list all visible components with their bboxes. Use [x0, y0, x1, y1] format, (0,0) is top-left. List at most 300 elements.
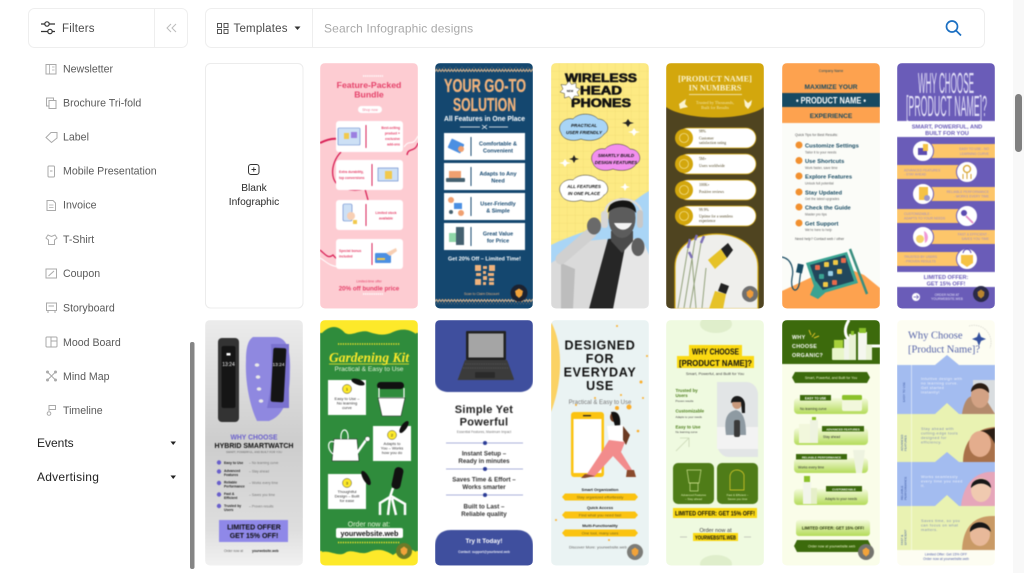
- heading: MAXIMIZE YOUR: [804, 84, 858, 91]
- tip: shortcuts: Use Shortcuts: [805, 159, 844, 165]
- feature: fast: FAST & EFFICIENT -: [958, 232, 989, 236]
- note 3: [328, 470, 373, 509]
- item: Mobile Presentation: Mobile Presentation: [63, 166, 157, 178]
- tip: explore: Explore Features: [805, 174, 852, 180]
- item: Coupon: Coupon: [63, 268, 100, 280]
- stat: 100K+: 100K+: [699, 183, 710, 187]
- decorative ribbons: [320, 139, 418, 263]
- dotted decoration: [338, 344, 400, 542]
- heading: CHOOSE: [792, 344, 817, 350]
- offer text: 20% off bundle price: [339, 286, 400, 292]
- icon: dropdown caret: [294, 26, 300, 30]
- order line: ORDER NOW AT: [935, 293, 959, 297]
- heading: IN NUMBERS: [689, 84, 742, 92]
- note 2: You – Works: [381, 446, 403, 450]
- banner: [792, 372, 870, 383]
- benefit: built to last: Reliable quality: [461, 511, 507, 518]
- row: easy to use: [897, 355, 995, 414]
- benefit: easy to use: [676, 424, 701, 434]
- panel: fast and efficient: Fast & Efficient –: [727, 493, 749, 497]
- item: Coupon: [46, 268, 100, 280]
- offer text: [339, 280, 400, 292]
- heading: DESIGNED: [565, 338, 635, 352]
- panel: advanced features: [673, 463, 714, 504]
- offer bar: [796, 520, 870, 536]
- heading: [PRODUCT NAME]?: [679, 358, 752, 368]
- background blue shape: [551, 190, 649, 264]
- feature: reliable: - WORKS EVERY TIME: [954, 194, 990, 198]
- experience label: EXPERIENCE: [810, 113, 853, 120]
- stat: 98%: satisfaction rating: [699, 141, 726, 145]
- card: why choose organic: [782, 320, 880, 566]
- cloud: practical: USER FRIENDLY: [566, 130, 603, 135]
- footer text: Limited Offer: Get 15% OFF: [925, 552, 967, 556]
- item: Invoice: [47, 200, 97, 212]
- icon: filter sliders: [41, 22, 55, 34]
- photo: woman with blender: [717, 382, 758, 457]
- benefit: instant setup: [446, 441, 523, 465]
- icon: purple smartwatch: [246, 337, 290, 421]
- subheading band: [897, 121, 995, 137]
- card: why choose product green: [666, 315, 764, 573]
- row: best-selling: [336, 121, 403, 152]
- benefit: saves time: [446, 467, 523, 491]
- benefit: quick access: Find what you need fast: [579, 512, 622, 518]
- tip: support: [796, 220, 839, 232]
- blank label: Infographic: [229, 197, 279, 208]
- tip: support: We're here to help: [805, 228, 832, 232]
- cloud: all features: ALL FEATURES: [566, 184, 601, 189]
- offer bar: LIMITED OFFER: GET 15% OFF!: [802, 526, 864, 530]
- row: reliable: [897, 452, 995, 506]
- category: Advertising: [37, 470, 176, 484]
- help line: Need help? Contact web / other: [795, 237, 845, 241]
- row: special bonus: Special bonus: [339, 249, 362, 253]
- icon: plus: [248, 164, 259, 174]
- blank label: Blank: [241, 183, 268, 194]
- card: feature-packed bundle: [320, 63, 418, 309]
- benefit: smart organization: Smart Organization: [582, 487, 619, 492]
- stat: 99.9%: 99.9%: [699, 208, 710, 212]
- heading: [565, 73, 637, 110]
- feature: advanced: ADVANCED FEATURES: [826, 428, 860, 432]
- subheading: All Features in One Place: [444, 114, 525, 123]
- row: advanced: efficiency.: [921, 440, 942, 444]
- row: easy to use: EASY TO USE: [902, 382, 906, 402]
- row: best-selling: add-ons: [387, 142, 400, 146]
- benefit: trusted: Users: [676, 393, 688, 398]
- feature: customizable: ADAPTS TO YOUR NEEDS: [904, 216, 946, 220]
- order line: [912, 293, 963, 301]
- benefit: easy to use: Easy to Use: [676, 424, 701, 430]
- feature list: Efficient: [224, 496, 238, 500]
- icon: purple smartwatch: 13:24: [272, 362, 285, 368]
- icon: lion badge: [627, 544, 643, 560]
- feature: adapts: Adapts to Any: [479, 172, 517, 178]
- offer text: Limited-time offer: [356, 280, 383, 284]
- stat: 5M+: 5M+: [699, 157, 706, 161]
- subheading: Built for Results: [701, 105, 729, 110]
- item: Storyboard: Storyboard: [63, 302, 115, 314]
- note 1: No learning: [337, 400, 357, 406]
- stat: 98%: [675, 128, 756, 148]
- offer bar: LIMITED OFFER: GET 15% OFF!: [675, 510, 755, 518]
- order line: Order now at:: [348, 522, 390, 528]
- feature: customizable: CUSTOMIZABLE -: [904, 212, 932, 216]
- cloud: practical: [560, 114, 608, 140]
- row: fast: FAST &: [900, 535, 904, 545]
- white curve accents: [845, 320, 880, 346]
- icon: lion badge: [973, 286, 989, 302]
- stat: 100K+: [675, 180, 756, 200]
- templates dropdown label: Templates: [234, 23, 288, 35]
- card: blank infographic: [206, 64, 303, 308]
- feature list: – Works every time: [249, 481, 278, 485]
- orange ground: [782, 268, 880, 309]
- icon: black smartwatch: [218, 338, 239, 422]
- row: reliable: RELIABLE: [900, 486, 904, 500]
- call to action: Contact: support@yourbrand.web: [458, 550, 510, 554]
- panel: advanced features: – Stay ahead: [685, 497, 702, 501]
- order line: [224, 549, 279, 553]
- feature: user-friendly: User-Friendly: [480, 202, 517, 208]
- call to action: [435, 530, 533, 566]
- card: your go-to solution: [435, 63, 533, 309]
- heading: [Product Name]?: [908, 344, 980, 356]
- row: fast: matters.: [921, 527, 938, 532]
- row: extra durability: [336, 160, 403, 190]
- row: easy to use: no learning curve.: [921, 380, 958, 386]
- order banner: [794, 540, 871, 552]
- note 3: for ease: [340, 498, 355, 503]
- benefit: saves time: Works smarter: [462, 484, 506, 491]
- feature: reliable: [912, 184, 995, 204]
- row: advanced: FEATURES: [904, 435, 908, 451]
- feature: reliable: RELIABLE PERFORMANCE: [947, 190, 990, 194]
- icon: templates grid: [218, 24, 228, 34]
- feature list: Reliable: [224, 480, 237, 484]
- cloud: design: SMARTLY BUILD: [598, 153, 635, 158]
- feature list: Easy to Use: [224, 461, 243, 465]
- feature list: Features: [224, 473, 238, 477]
- heading: Simple Yet: [455, 404, 513, 416]
- row: limited stock: available: [379, 216, 393, 220]
- feature: great value: Great Value: [483, 232, 513, 238]
- feature: comfortable: [444, 133, 525, 160]
- feature: customizable: CUSTOMIZABLE: [832, 488, 856, 492]
- benefit: smart organization: [562, 487, 638, 500]
- note 2: 2: [391, 432, 394, 438]
- feature: customizable: Adapts to your needs: [825, 497, 857, 501]
- stat: 98%: Customer: [699, 136, 715, 140]
- row: fast: can focus on what: [921, 522, 959, 528]
- note 1: [328, 377, 366, 415]
- tip: explore: Unlock full potential: [805, 182, 834, 186]
- feature: reliable: [794, 450, 868, 473]
- icon: lion badge: [858, 544, 874, 560]
- icon: collapse chevrons: [167, 24, 176, 32]
- item: Mind Map: Mind Map: [63, 371, 110, 383]
- item: Invoice: Invoice: [63, 200, 97, 212]
- row: special bonus: [336, 239, 403, 269]
- card: wireless headphones: [551, 63, 649, 309]
- item: Mood Board: Mood Board: [63, 337, 121, 349]
- heading: Why Choose: [908, 330, 963, 342]
- stat: 5M+: Users worldwide: [699, 164, 725, 168]
- subheading: SMART, POWERFUL, AND BUILT FOR YOU: [226, 450, 282, 454]
- subheading: Practical & Easy to Use: [569, 400, 632, 406]
- heading: YOUR GO-TO: [444, 76, 526, 96]
- stat: 99.9%: [675, 206, 756, 226]
- category: Events: [37, 436, 176, 450]
- card: maximize your product: [782, 63, 880, 309]
- row: easy to use: Get started: [921, 385, 944, 390]
- item: Timeline: Timeline: [63, 405, 103, 417]
- sparkles: [559, 119, 640, 191]
- website pill: yourwebsite.web: [341, 529, 399, 538]
- filters button: [28, 8, 188, 48]
- icon: garden fork: [380, 466, 405, 515]
- order line: Order now at: [224, 549, 243, 553]
- card: gardening kit: [320, 320, 418, 566]
- item: Newsletter: Newsletter: [63, 64, 114, 76]
- discover line: Discover More: yourwebsite.web: [569, 544, 628, 550]
- note 3: Design – Built: [335, 494, 360, 498]
- order line: Order now at: [699, 528, 732, 534]
- feature: easy: LEARNING CURVE: [960, 152, 990, 156]
- feature list: – Proven results: [249, 504, 274, 508]
- tip: updated: Stay Updated: [805, 190, 843, 196]
- feature: great value: for Price: [487, 238, 509, 244]
- feature: easy: [912, 140, 995, 162]
- row: advanced: ADVANCED: [900, 434, 904, 451]
- card: why choose product purple: [897, 63, 995, 309]
- row: reliable: Works seamlessly: [921, 474, 958, 479]
- feature: reliable: RELIABLE PERFORMANCE: [802, 456, 841, 460]
- heading: [444, 78, 526, 112]
- note 1: 1: [346, 386, 349, 392]
- shop now pill: Shop now: [362, 108, 378, 112]
- tip: updated: Get the latest upgrades: [805, 197, 840, 201]
- note 2: Adapts to: [384, 441, 401, 446]
- filters label: Filters: [62, 23, 95, 35]
- benefit: multi-functionality: One tool, many uses: [582, 530, 618, 536]
- offer band: [897, 272, 995, 288]
- order banner: Order now at yourwebsite.web: [808, 544, 855, 548]
- tip: guide: Master pro tips: [805, 212, 827, 216]
- benefit: trusted: [676, 388, 698, 403]
- heading: [906, 68, 987, 123]
- heading: [214, 432, 294, 450]
- panel: fast and efficient: [717, 463, 758, 504]
- feature: customizable: [897, 206, 978, 226]
- heading: WIRELESS: [565, 73, 637, 85]
- heading: [PRODUCT NAME]: [678, 74, 752, 84]
- benefit: customizable: Customizable: [676, 408, 705, 414]
- heading: HYBRID SMARTWATCH: [214, 443, 294, 450]
- icon: tablet illustration: [782, 249, 867, 299]
- offer band: GET 15% OFF!: [927, 282, 966, 288]
- note 2: how you do: [382, 450, 403, 455]
- row: limited stock: Limited stock: [375, 211, 397, 215]
- stat: 99.9%: Uptime for a seamless: [699, 214, 733, 218]
- row: best-selling: Best-selling: [381, 126, 400, 130]
- benefit: quick access: Quick Access: [587, 505, 614, 510]
- sidebar navigation: [37, 64, 176, 484]
- qr code: [475, 265, 495, 285]
- row: reliable: PERFORMANCE: [904, 477, 908, 500]
- feature list: Trusted by: [224, 504, 241, 508]
- item: Label: Label: [63, 132, 89, 144]
- subheading band: BUILT FOR YOU: [925, 131, 969, 137]
- heading: Powerful: [460, 416, 508, 428]
- tip: guide: Check the Guide: [805, 206, 852, 212]
- feature list: Advanced: [224, 469, 240, 473]
- row: reliable: every time you need: [921, 478, 963, 484]
- benefit: instant setup: Instant Setup –: [462, 450, 507, 458]
- row: advanced: [897, 403, 995, 462]
- heading: SOLUTION: [453, 95, 516, 115]
- feature: easy to use: EASY TO USE: [805, 396, 826, 400]
- feature: user-friendly: [444, 193, 525, 220]
- benefit: built to last: Built to Last –: [464, 504, 505, 510]
- panel: fast and efficient: Saves you time: [728, 497, 748, 501]
- tip: customize: Customize Settings: [805, 144, 859, 150]
- benefit: multi-functionality: Multi-Functionality: [582, 523, 619, 528]
- feature: trusted: - PROVEN RESULTS: [904, 260, 937, 264]
- card: product in numbers: [666, 63, 764, 309]
- row: reliable: it.: [921, 483, 925, 488]
- heading: USE: [586, 379, 614, 393]
- feature list: – Stay ahead: [249, 470, 269, 474]
- note 1: Easy to Use –: [335, 396, 360, 401]
- benefit: easy to use: No learning curve: [676, 430, 698, 434]
- feature: comfortable: Comfortable &: [479, 142, 517, 148]
- feature: trusted: TRUSTED BY USERS: [904, 255, 938, 259]
- tip: updated: [796, 188, 843, 201]
- icon: watering can: [329, 430, 370, 461]
- search bar: [206, 8, 984, 48]
- row: special bonus: included: [339, 254, 353, 258]
- feature list: – Saves you time: [249, 493, 275, 497]
- item: Brochure Tri-fold: Brochure Tri-fold: [63, 98, 141, 110]
- heading: Bundle: [354, 90, 384, 100]
- heading: FOR: [586, 352, 614, 366]
- row: fast: EFFICIENT: [904, 529, 908, 545]
- photo: man with headphones: [551, 198, 649, 309]
- cloud: design: [592, 144, 640, 170]
- feature: advanced: Stay ahead: [823, 435, 840, 439]
- illustration: phone and woman: [571, 412, 636, 478]
- feature: easy to use: [794, 395, 868, 414]
- heading: Feature-Packed: [337, 80, 401, 90]
- row: best-selling: product +: [385, 132, 400, 136]
- offer box: GET 15% OFF!: [230, 533, 278, 540]
- row: extra durability: Extra durability,: [339, 170, 364, 174]
- offer box: [219, 520, 288, 542]
- feature: reliable: Works every time: [798, 466, 824, 470]
- product name band: [782, 93, 880, 107]
- feature: adapts: Need: [491, 178, 505, 184]
- feature: adapts: [444, 163, 525, 190]
- feature list: Users: [224, 508, 234, 512]
- heading: WHY: [792, 335, 806, 341]
- item: T-Shirt: T-Shirt: [63, 234, 94, 246]
- website label: YOURWEBSITE.WEB: [695, 536, 736, 542]
- feature: user-friendly: & Simple: [486, 208, 510, 214]
- card: simple yet powerful: [435, 320, 533, 566]
- tip: guide: [796, 204, 852, 216]
- tip: explore: [796, 172, 852, 186]
- row: fast: [897, 495, 995, 550]
- item: T-Shirt: [46, 234, 94, 246]
- row: easy to use: Intuitive design with: [921, 376, 962, 381]
- benefit: trusted: Proven results: [676, 399, 694, 403]
- row: limited stock: [336, 200, 403, 230]
- icon: black smartwatch: 13:24: [222, 362, 235, 368]
- offer box: LIMITED OFFER: [227, 524, 281, 532]
- starburst badge: NEW: [567, 89, 574, 93]
- note 1: curve: [342, 405, 353, 410]
- card: designed for everyday use: [551, 320, 649, 566]
- heading: PHONES: [571, 98, 631, 110]
- row: best-selling: exclusive: [385, 137, 400, 141]
- benefit: multi-functionality: [562, 523, 638, 536]
- feature: comfortable: Convenient: [483, 148, 513, 154]
- product group: [832, 328, 872, 360]
- icon: lion badge: [510, 284, 528, 302]
- starburst badge: [560, 81, 580, 100]
- icon: arrow: [676, 438, 689, 451]
- rays: [809, 330, 819, 338]
- item: Label: [46, 132, 89, 144]
- tips intro: Quick Tips for Best Results:: [795, 133, 838, 137]
- search placeholder: Search Infographic designs: [324, 22, 473, 36]
- cloud: design: DESIGN FEATURES: [595, 160, 637, 165]
- offer band: LIMITED OFFER:: [924, 275, 969, 281]
- stat: 5M+: [675, 154, 756, 174]
- heading: [677, 345, 754, 368]
- banner: Smart, Powerful, and Built for You: [805, 376, 857, 380]
- page scrollbar: [1013, 0, 1024, 573]
- row: fast: Saves time, so you: [921, 518, 960, 523]
- feature: fast: [912, 226, 995, 248]
- feature: advanced: [794, 417, 868, 445]
- stat: 100K+: Positive reviews: [699, 190, 725, 194]
- company name: Company Name: [819, 69, 843, 73]
- icon: lion badge: [396, 543, 412, 559]
- heading: WHY CHOOSE: [230, 432, 278, 442]
- heading: HEAD: [580, 86, 622, 98]
- row: advanced: cutting-edge tools: [921, 430, 958, 436]
- feature list: [217, 460, 279, 512]
- category: Events: Events: [37, 436, 74, 450]
- sidebar scrollbar: [190, 342, 194, 569]
- offer line: Get 20% Off – Limited Time!: [448, 256, 521, 262]
- card: why choose product serif: [897, 320, 995, 566]
- tip: shortcuts: Work faster, save time: [805, 166, 838, 170]
- benefit: smart organization: Stay organized effortlessly: [577, 494, 623, 500]
- birds: [679, 99, 752, 109]
- website label: [680, 533, 751, 542]
- cloud: all features: IN ONE PLACE: [568, 191, 601, 196]
- feature: advanced: - STAY AHEAD: [904, 172, 927, 176]
- heading: ORGANIC?: [792, 353, 823, 359]
- benefit: customizable: Adapts to your needs: [676, 415, 703, 419]
- footer text: Order now at yourwebsite.web: [923, 557, 969, 561]
- category: Advertising: Advertising: [37, 470, 99, 484]
- feature: trusted: [897, 248, 978, 270]
